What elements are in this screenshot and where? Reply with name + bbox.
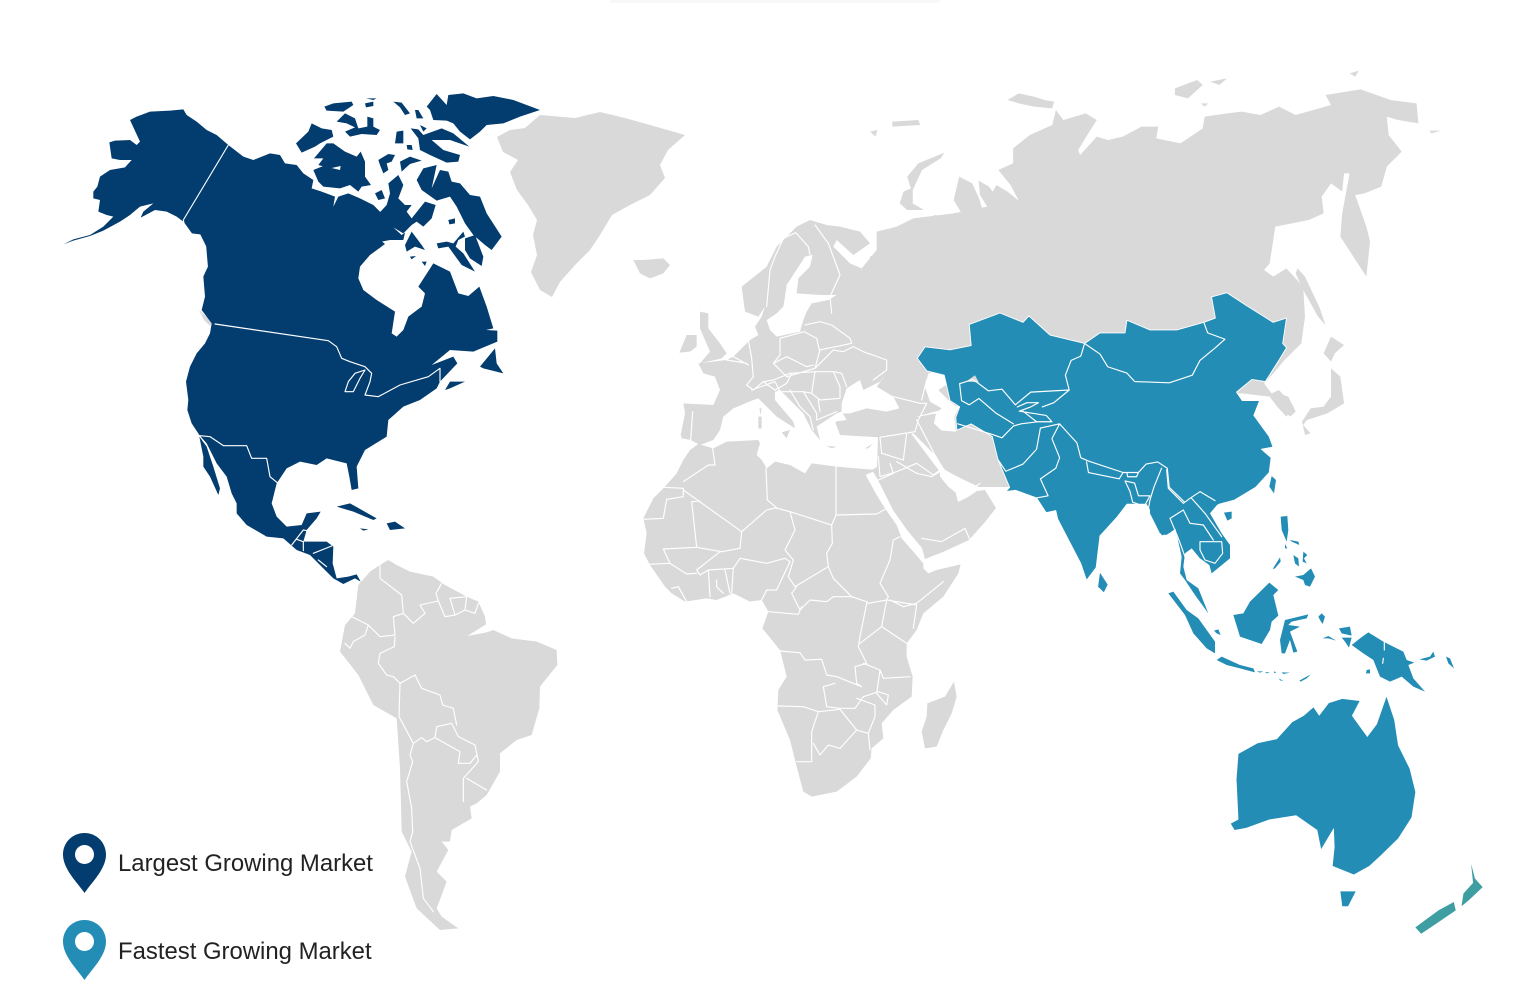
icon: blue location pin xyxy=(63,920,106,980)
Black Sea xyxy=(842,373,899,413)
landmass: Newfoundland and Nova Scotia xyxy=(445,348,503,390)
landmass: Russia and Siberia xyxy=(870,89,1418,417)
landmass: Europe and northern Eurasia west xyxy=(681,200,1020,445)
Persian Gulf xyxy=(940,470,973,495)
Caspian Sea xyxy=(925,370,958,432)
landmass: Baja California xyxy=(199,437,220,495)
label: fastest growing market: Fastest Growing Market xyxy=(118,938,372,965)
landmass: Asia mainland xyxy=(917,293,1287,580)
landmass: Arabia and Levant xyxy=(872,432,996,559)
borders: South America xyxy=(345,565,487,912)
Great Lakes and borders xyxy=(183,145,440,567)
landmass: Sakhalin and Japan xyxy=(1279,268,1344,435)
landmass: Britain, Ireland, Iceland and Mediterranean islands xyxy=(633,258,873,448)
landmass: Arctic archipelago xyxy=(296,93,540,272)
landmass: Madagascar xyxy=(922,682,957,748)
landmass: North America mainland xyxy=(63,109,497,584)
icon: dark blue location pin xyxy=(63,833,106,893)
landmass: maritime Southeast Asia xyxy=(1168,476,1454,692)
country borders: South and Central Asia xyxy=(958,322,1225,511)
borders: Africa and Arabia xyxy=(643,448,970,762)
country borders: Indochina and New Guinea xyxy=(1167,470,1384,663)
landmass: Sri Lanka, Australia and Tasmania xyxy=(1098,573,1415,906)
landmass: Vancouver Island xyxy=(199,310,212,326)
landmass: Africa xyxy=(643,440,961,797)
landmass: Greenland xyxy=(497,112,685,297)
Aral Sea remnant xyxy=(966,375,979,382)
legend: largest growing market xyxy=(63,833,373,893)
landmass: Iran xyxy=(900,400,1010,487)
label: largest growing market: Largest Growing Market xyxy=(118,850,373,877)
region: rest of world (grey) xyxy=(199,71,1441,930)
landmass: Arctic islands and Novaya Zemlya xyxy=(870,71,1441,210)
landmass: South America xyxy=(340,560,557,930)
region: North America (largest growing market) xyxy=(63,93,540,584)
Baltic Sea xyxy=(767,255,837,337)
Aegean xyxy=(817,418,837,435)
seas cut into Eurasia xyxy=(767,255,973,495)
landmass: New Zealand xyxy=(1415,864,1483,934)
landmass: Caribbean islands xyxy=(337,503,405,531)
region: Asia Pacific (fastest growing market) xyxy=(917,293,1483,934)
legend: fastest growing market xyxy=(63,920,372,980)
borders: Europe and Middle East xyxy=(691,225,980,493)
landmass: Indochina and Malay peninsula xyxy=(1150,487,1230,613)
